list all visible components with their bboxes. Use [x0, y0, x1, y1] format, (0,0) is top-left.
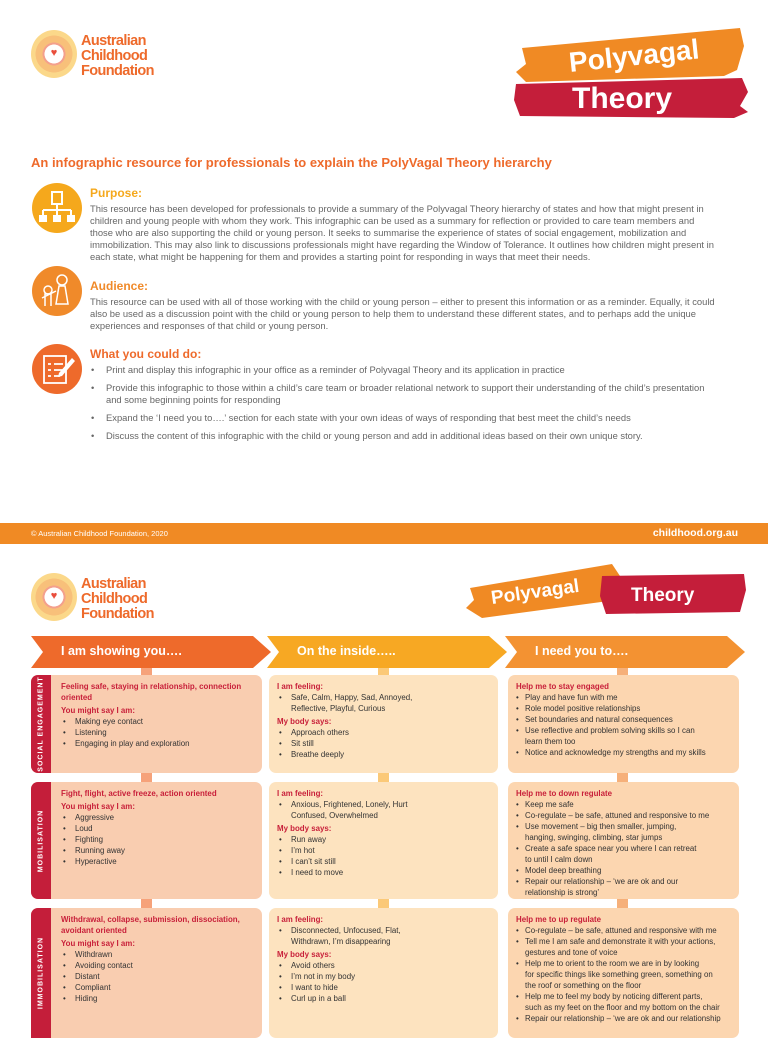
panel: immobilisation showing: IMMOBILISATION	[38, 937, 44, 1009]
what you could do text: Expand the ‘I need you to….’ section for each state with your own ideas of ways of responding that best meet the child’s needs	[106, 412, 631, 423]
purpose text: each state, what might be happening for them and provides a starting point for responding in ways that meet their needs.	[90, 251, 590, 262]
what you could do text: What you could do:	[90, 347, 201, 361]
panel: immobilisation inside: My body says:	[277, 950, 331, 959]
purpose text	[90, 186, 714, 262]
what you could do text: •	[91, 430, 94, 441]
title brush: Polyvagal Theory: Polyvagal	[567, 33, 701, 78]
audience text: also be used as a discussion point with the child or young person to help them to understand these different states, and to perhaps add the unique	[90, 308, 696, 319]
purpose text: those who are also supporting the child or young person. It seeks to summarise the experience of states of social engagement, mobilization and	[90, 227, 686, 238]
arrow: I am showing you	[31, 636, 271, 668]
panel: social engagement inside: Safe, Calm, Happy, Sad, Annoyed,	[291, 693, 412, 702]
title brush small: Theory	[631, 585, 695, 606]
logo top: ♥	[51, 47, 57, 59]
panel: immobilisation need: Repair our relationship – ‘we are ok and our relationship	[525, 1014, 721, 1023]
panel: mobilisation need	[508, 782, 739, 899]
panel: mobilisation need: Repair our relationship – ‘we are ok and our	[525, 877, 678, 886]
footer bar	[0, 523, 768, 544]
panel: mobilisation showing: Fight, flight, active freeze, action oriented	[61, 789, 217, 798]
panel: immobilisation inside: I want to hide	[291, 983, 338, 992]
purpose text: This resource has been developed for professionals to provide a summary of the Polyvagal Theory hierarchy of states and how that might present in	[90, 203, 704, 214]
logo second page	[31, 573, 154, 622]
what you could do text: Print and display this infographic in your office as a reminder of Polyvagal Theory and its application in practice	[106, 364, 565, 375]
panel: social engagement showing: You might say I am:	[61, 706, 135, 715]
panel: mobilisation showing: Hyperactive	[75, 857, 117, 866]
logo top: Australian	[81, 33, 146, 49]
panel: mobilisation showing: Fighting	[75, 835, 103, 844]
panel: social engagement inside	[269, 675, 498, 773]
panel: social engagement inside: My body says:	[277, 717, 331, 726]
panel: social engagement showing	[31, 675, 262, 773]
panel: social engagement need: Set boundaries and natural consequences	[525, 715, 673, 724]
arrow: I am showing you: I am showing you….	[61, 644, 182, 658]
panel: mobilisation need: to until I calm down	[525, 855, 593, 864]
panel: immobilisation showing: Hiding	[75, 994, 97, 1003]
panel: immobilisation showing: Avoiding contact	[75, 961, 133, 970]
what you could do text: •	[91, 412, 94, 423]
panel: mobilisation inside: Confused, Overwhelmed	[291, 811, 378, 820]
purpose text: children and young people with whom they work. This infographic can be used as a summary for reflection or provided to care team members and	[90, 215, 694, 226]
panel: immobilisation need: Tell me I am safe and demonstrate it with your actions,	[525, 937, 715, 946]
purpose text: immobilization. This may also link to discussions professionals might have regarding the Window of Tolerance. It outlines how children might present in	[90, 239, 714, 250]
audience text: Audience:	[90, 279, 148, 293]
title brush small	[466, 564, 746, 618]
panel: social engagement need: Play and have fun with me	[525, 693, 618, 702]
arrow: I need you to: I need you to….	[535, 644, 628, 658]
panel: immobilisation need: gestures and tone of voice	[525, 948, 618, 957]
panel: immobilisation showing: You might say I am:	[61, 939, 135, 948]
panel: immobilisation need: Help me to up regulate	[516, 915, 601, 924]
panel: mobilisation inside: I need to move	[291, 868, 343, 877]
panel: immobilisation need: Co-regulate – be safe, attuned and responsive with me	[525, 926, 717, 935]
icon: what you could do	[32, 344, 82, 394]
panel: social engagement showing: Making eye contact	[75, 717, 143, 726]
audience text: experiences and responses of that child or young person.	[90, 320, 328, 331]
what you could do text: •	[91, 364, 94, 375]
panel: mobilisation need: relationship is strong’	[525, 888, 599, 897]
panel: immobilisation need: Help me to feel my body by noticing different parts,	[525, 992, 702, 1001]
panel: immobilisation inside: Curl up in a ball	[291, 994, 346, 1003]
audience text	[90, 279, 715, 331]
panel: mobilisation showing: Running away	[75, 846, 125, 855]
panel: immobilisation showing: Withdrawn	[75, 950, 112, 959]
panel: immobilisation inside: I am feeling:	[277, 915, 323, 924]
panel: immobilisation showing: Compliant	[75, 983, 111, 992]
panel: immobilisation need: for specific things like something green, something on	[525, 970, 713, 979]
connectors	[141, 668, 152, 677]
title brush: Polyvagal Theory: Theory	[572, 82, 672, 115]
logo second page: Australian	[81, 576, 146, 592]
what you could do text: Discuss the content of this infographic with the child or young person and add in additional ideas based on their own unique story.	[106, 430, 643, 441]
panel: mobilisation need: Create a safe space near you where I can retreat	[525, 844, 696, 853]
panel: immobilisation inside	[269, 908, 498, 1038]
panel: mobilisation need: Use movement – big then smaller, jumping,	[525, 822, 676, 831]
panel: mobilisation need: Help me to down regulate	[516, 789, 612, 798]
title brush small: Polyvagal	[490, 576, 581, 609]
panel: social engagement need	[508, 675, 739, 773]
panel: social engagement showing: oriented	[61, 693, 92, 702]
panel: social engagement inside: Sit still	[291, 739, 314, 748]
what you could do text	[90, 347, 704, 441]
panel: mobilisation inside: I am feeling:	[277, 789, 323, 798]
logo second page: ♥	[51, 590, 57, 602]
panel: immobilisation showing: Distant	[75, 972, 100, 981]
panel: mobilisation showing	[31, 782, 262, 899]
panel: social engagement need: Help me to stay engaged	[516, 682, 609, 691]
panel: mobilisation inside: My body says:	[277, 824, 331, 833]
icon: purpose	[32, 183, 82, 233]
panel: mobilisation need: Keep me safe	[525, 800, 574, 809]
purpose text: Purpose:	[90, 186, 142, 200]
title brush: Polyvagal Theory	[514, 28, 748, 118]
logo top: Foundation	[81, 63, 154, 79]
panel: mobilisation need: Co-regulate – be safe, attuned and responsive to me	[525, 811, 709, 820]
panel: social engagement need: learn them too	[525, 737, 575, 746]
panel: immobilisation showing: Withdrawal, collapse, submission, dissociation,	[61, 915, 240, 924]
panel: immobilisation inside: Avoid others	[291, 961, 335, 970]
panel: mobilisation showing: MOBILISATION	[38, 809, 44, 872]
panel: social engagement inside: I am feeling:	[277, 682, 323, 691]
audience text: This resource can be used with all of those working with the child or young person – either to present this information or as a reminder. Equally, it could	[90, 296, 715, 307]
panel: mobilisation inside: I’m hot	[291, 846, 315, 855]
panel: mobilisation inside: Run away	[291, 835, 326, 844]
logo second page: Childhood	[81, 591, 147, 607]
icon: audience	[32, 266, 82, 316]
panel: social engagement inside: Reflective, Playful, Curious	[291, 704, 385, 713]
panel: social engagement inside: Breathe deeply	[291, 750, 344, 759]
panel: immobilisation need	[508, 908, 739, 1038]
panel: immobilisation inside: Withdrawn, I’m disappearing	[291, 937, 391, 946]
panel: mobilisation need: hanging, swinging, climbing, star jumps	[525, 833, 662, 842]
panel: social engagement need: Role model positive relationships	[525, 704, 640, 713]
arrow: I need you to	[505, 636, 745, 668]
footer bar: © Australian Childhood Foundation, 2020	[31, 529, 168, 538]
panel: mobilisation showing: Loud	[75, 824, 93, 833]
logo top	[31, 30, 154, 79]
panel: social engagement need: Notice and acknowledge my strengths and my skills	[525, 748, 706, 757]
panel: immobilisation showing: avoidant oriented	[61, 926, 127, 935]
panel: mobilisation inside	[269, 782, 498, 899]
panel: social engagement showing: Feeling safe, staying in relationship, connection	[61, 682, 241, 691]
panel: social engagement need: Use reflective and problem solving skills so I can	[525, 726, 695, 735]
subtitle: An infographic resource for professionals to explain the PolyVagal Theory hierarchy	[31, 155, 552, 170]
arrow: On the inside	[267, 636, 507, 668]
panel: immobilisation showing	[31, 908, 262, 1038]
logo top: Childhood	[81, 48, 147, 64]
panel: mobilisation inside: I can’t sit still	[291, 857, 336, 866]
footer bar: childhood.org.au	[653, 527, 738, 539]
panel: social engagement showing: SOCIAL ENGAGEMENT	[38, 676, 44, 772]
panel: immobilisation inside: Disconnected, Unfocused, Flat,	[291, 926, 401, 935]
panel: immobilisation need: such as my feet on the floor and my bottom on the chair	[525, 1003, 720, 1012]
panel: social engagement showing: Engaging in play and exploration	[75, 739, 190, 748]
panel: mobilisation need: Model deep breathing	[525, 866, 601, 875]
panel: mobilisation showing: Aggressive	[75, 813, 114, 822]
panel: immobilisation need: Help me to orient to the room we are in by looking	[525, 959, 699, 968]
what you could do text: Provide this infographic to those within a child’s care team or broader relational network to support their understanding of the child’s presentation	[106, 382, 704, 393]
panel: immobilisation need: the roof or something on the floor	[525, 981, 641, 990]
panel: mobilisation showing: You might say I am:	[61, 802, 135, 811]
logo second page: Foundation	[81, 606, 154, 622]
what you could do text: and some beginning points for responding	[106, 394, 281, 405]
arrow: On the inside: On the inside…..	[297, 644, 396, 658]
panel: mobilisation inside: Anxious, Frightened, Lonely, Hurt	[291, 800, 408, 809]
panel: social engagement inside: Approach others	[291, 728, 349, 737]
what you could do text: •	[91, 382, 94, 393]
panel: social engagement showing: Listening	[75, 728, 107, 737]
panel: immobilisation inside: I’m not in my body	[291, 972, 355, 981]
